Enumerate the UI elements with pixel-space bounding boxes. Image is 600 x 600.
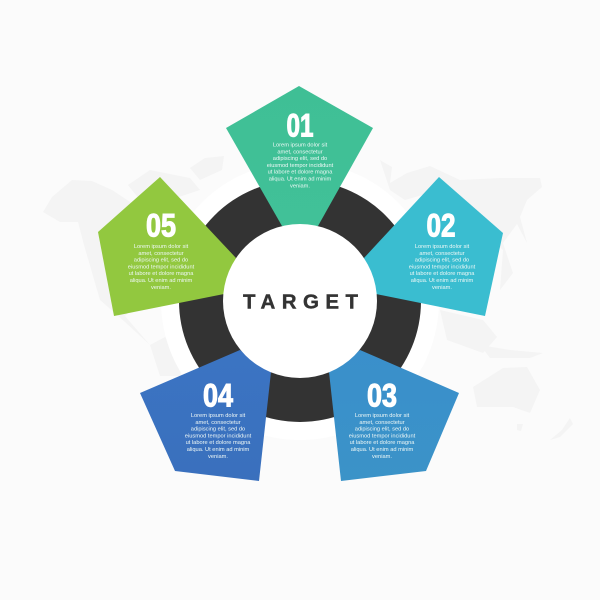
text block 05: [128, 244, 195, 291]
text block 05: veniam.: [151, 285, 171, 291]
text block 02: veniam.: [432, 285, 452, 291]
text block 03: amet, consectetur: [359, 420, 405, 426]
text block 04: Lorem ipsum dolor sit: [191, 413, 246, 419]
text block 02: aliqua. Ut enim ad minim: [411, 278, 474, 284]
dark ring: [179, 180, 421, 422]
text block 01: [267, 142, 334, 189]
text block 04: aliqua. Ut enim ad minim: [187, 447, 250, 453]
text block 04: eiusmod tempor incididunt: [185, 433, 252, 439]
title: TARGET: [243, 290, 358, 314]
text block 03: Lorem ipsum dolor sit: [355, 413, 410, 419]
number 04: 04: [203, 378, 233, 414]
text block 04: amet, consectetur: [195, 420, 241, 426]
text block 05: aliqua. Ut enim ad minim: [130, 278, 193, 284]
text block 04: veniam.: [208, 454, 228, 460]
number 05: 05: [146, 208, 176, 244]
text block 01: amet, consectetur: [277, 149, 323, 155]
number 02: 02: [426, 208, 456, 244]
text block 05: adipiscing elit, sed do: [134, 258, 188, 264]
text block 05: eiusmod tempor incididunt: [128, 264, 195, 270]
text block 02: adipiscing elit, sed do: [415, 258, 469, 264]
text block 01: adipiscing elit, sed do: [273, 156, 327, 162]
white outer ring: [161, 162, 439, 440]
panel 01: [226, 86, 373, 226]
text block 03: adipiscing elit, sed do: [355, 427, 409, 433]
text block 02: eiusmod tempor incididunt: [409, 264, 476, 270]
text block 05: Lorem ipsum dolor sit: [134, 244, 189, 250]
panel 05: [98, 177, 236, 316]
center circle: [223, 224, 377, 378]
text block 03: aliqua. Ut enim ad minim: [351, 447, 414, 453]
text block 02: Lorem ipsum dolor sit: [415, 244, 470, 250]
text block 03: veniam.: [372, 454, 392, 460]
text block 01: ut labore et dolore magna: [268, 170, 333, 176]
text block 03: [349, 413, 416, 460]
world map: [43, 156, 573, 440]
text block 01: Lorem ipsum dolor sit: [273, 142, 328, 148]
text block 05: ut labore et dolore magna: [129, 271, 194, 277]
text block 03: ut labore et dolore magna: [350, 440, 415, 446]
text block 02: [409, 244, 476, 291]
number 01: 01: [286, 108, 314, 144]
text block 01: eiusmod tempor incididunt: [267, 163, 334, 169]
text block 01: veniam.: [290, 183, 310, 189]
text block 01: aliqua. Ut enim ad minim: [269, 176, 332, 182]
panel 04: [140, 350, 271, 481]
text block 02: ut labore et dolore magna: [410, 271, 475, 277]
text block 02: amet, consectetur: [419, 251, 465, 257]
panel 03: [329, 350, 459, 481]
text block 05: amet, consectetur: [138, 251, 184, 257]
text block 04: ut labore et dolore magna: [186, 440, 251, 446]
number 03: 03: [367, 378, 397, 414]
panel 02: [364, 177, 503, 316]
text block 04: adipiscing elit, sed do: [191, 427, 245, 433]
text block 03: eiusmod tempor incididunt: [349, 433, 416, 439]
text block 04: [185, 413, 252, 460]
